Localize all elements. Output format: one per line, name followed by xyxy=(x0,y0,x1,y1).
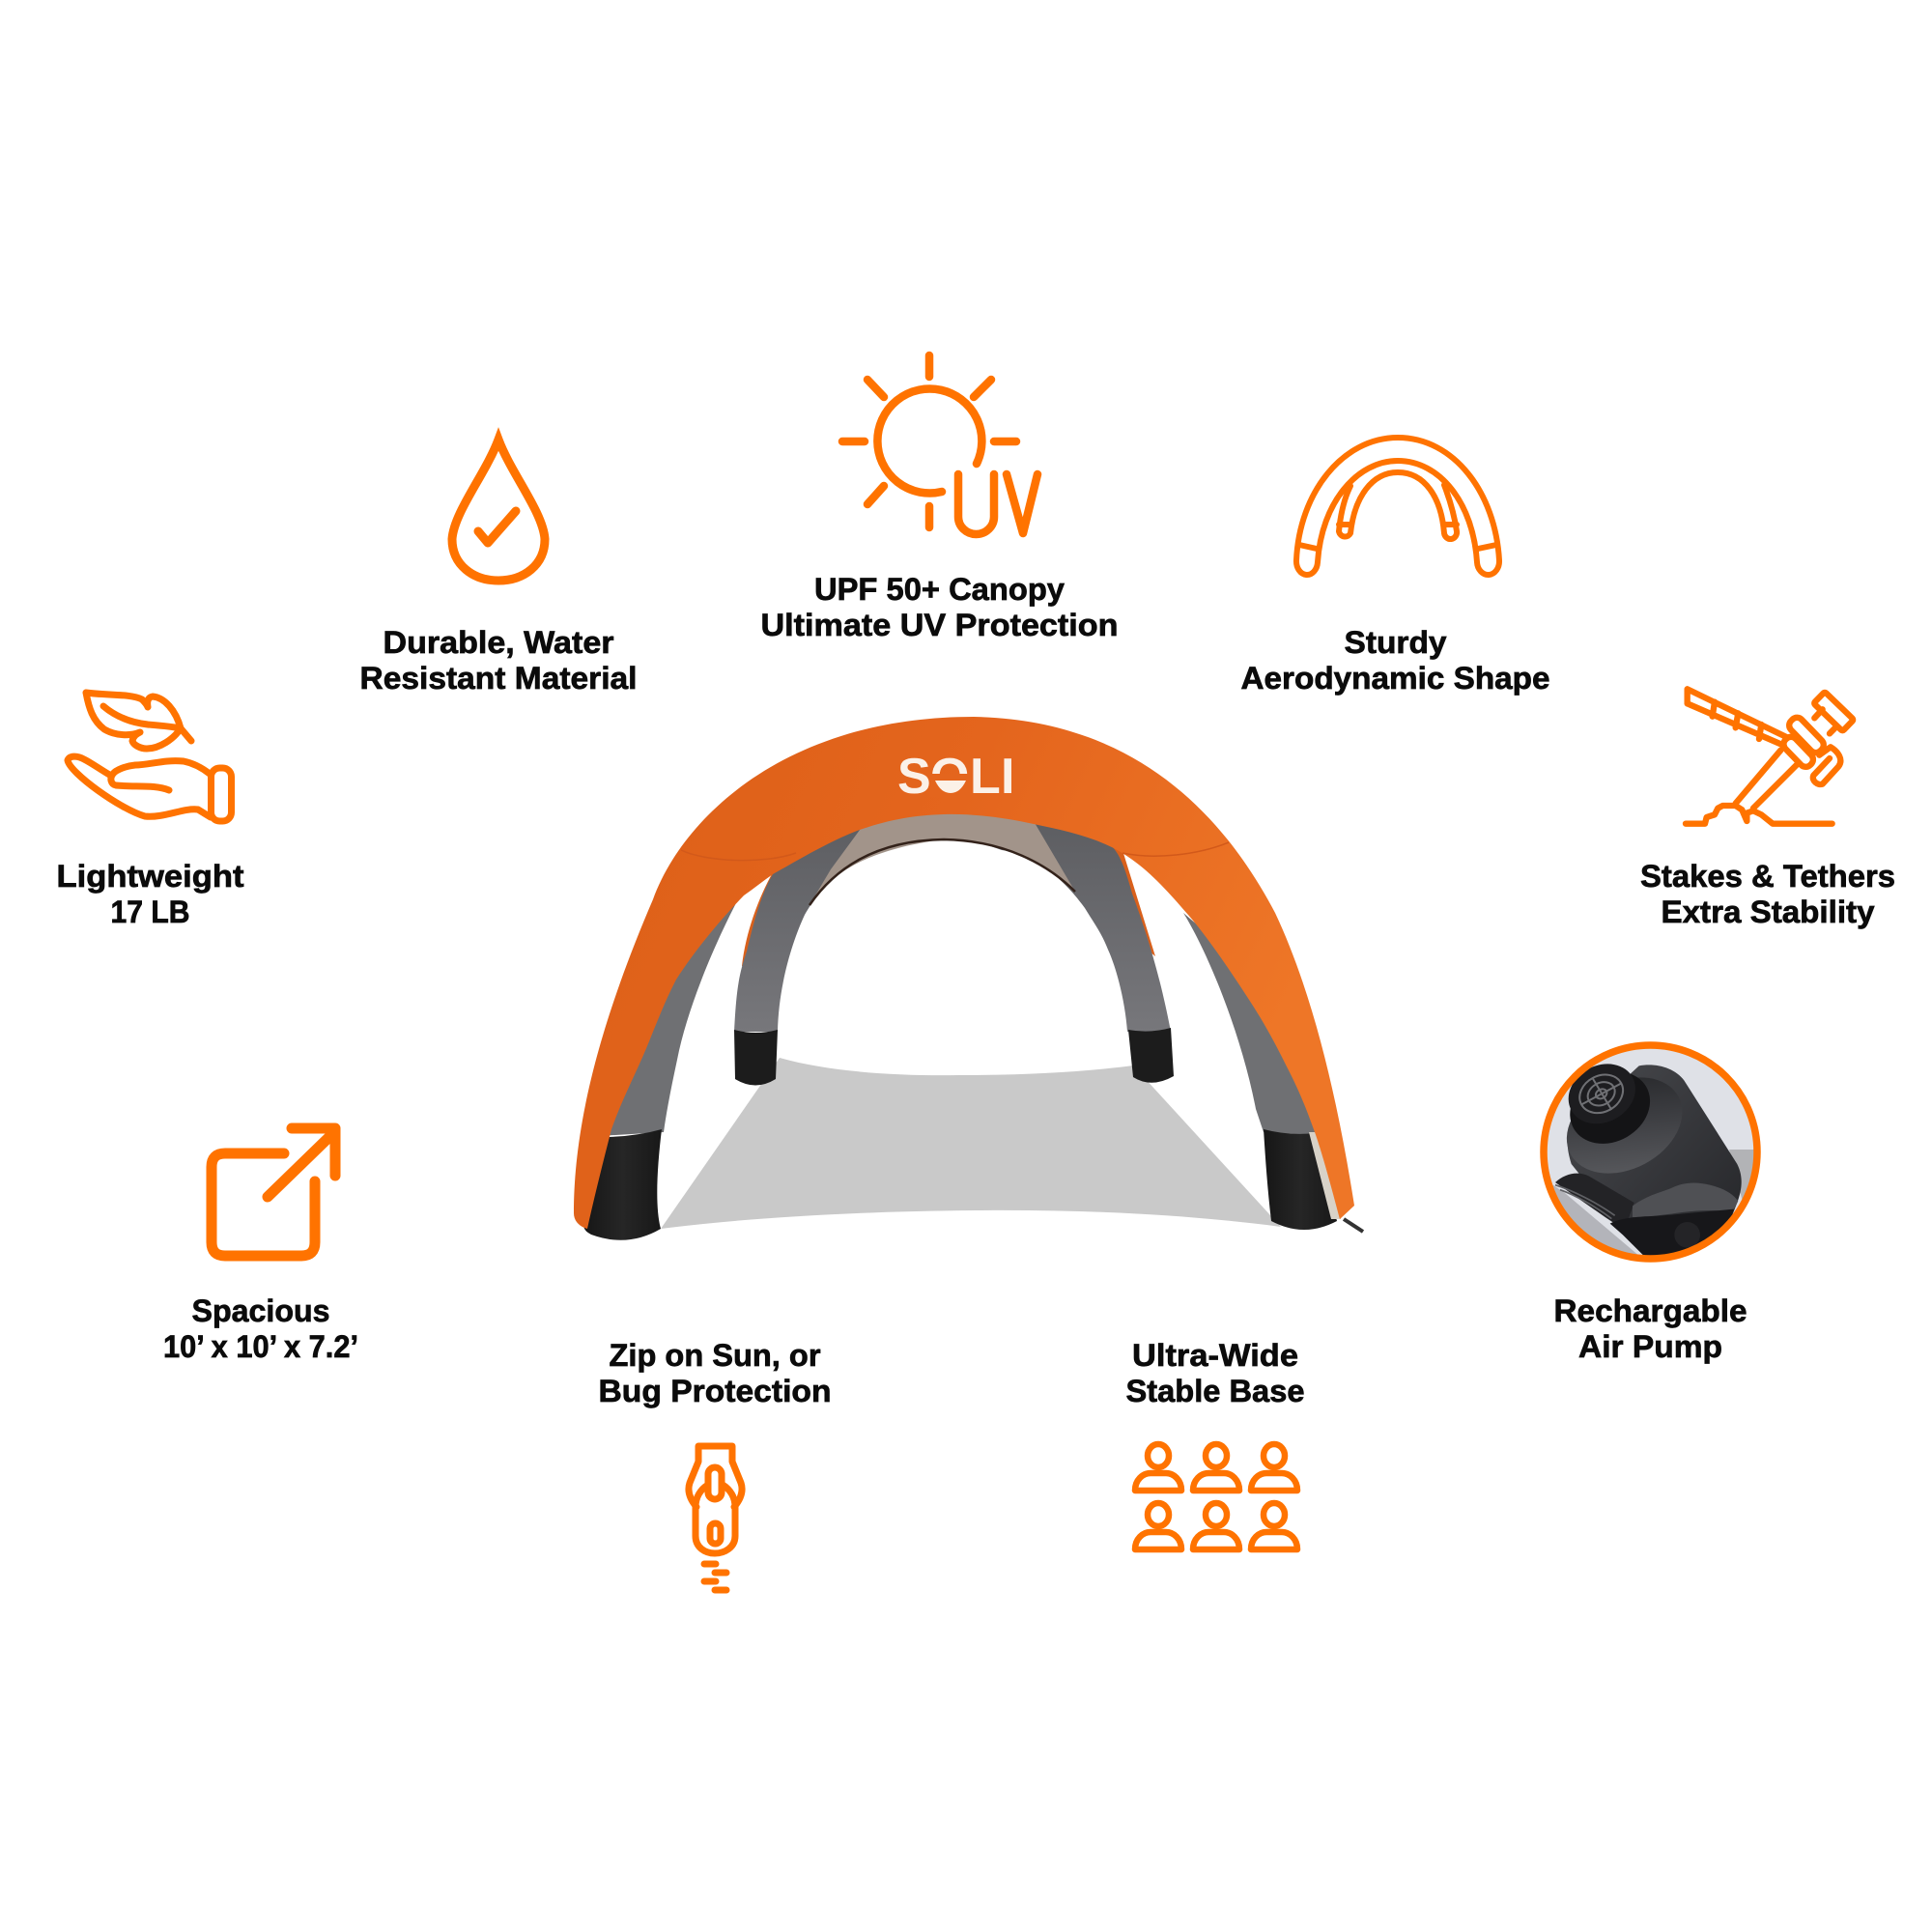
icon: zipper xyxy=(689,1446,742,1590)
label: spacious: 10’ x 10’ x 7.2’ xyxy=(163,1329,358,1364)
icon: sun with UV xyxy=(842,355,1037,534)
label: durable material: Durable, Water xyxy=(383,625,614,660)
pump circle ring xyxy=(1544,1045,1757,1259)
back right cuff xyxy=(1128,1028,1174,1083)
air pump photo in circle xyxy=(1536,1038,1768,1270)
back orange strips xyxy=(742,846,1155,966)
orange canopy xyxy=(574,717,1354,1229)
icon: six people xyxy=(1135,1444,1297,1549)
front right grey leg xyxy=(1183,913,1323,1136)
label: air pump: Rechargable xyxy=(1553,1293,1747,1328)
label: air pump: Air Pump xyxy=(1578,1329,1722,1364)
rear opening edge xyxy=(810,839,1075,905)
label: lightweight: 17 LB xyxy=(110,895,189,929)
back arch xyxy=(734,816,1171,1032)
label: zip protection: Zip on Sun, or xyxy=(609,1338,821,1373)
SOLI logo: SOLI xyxy=(897,749,1014,805)
label: sturdy shape xyxy=(1240,625,1549,696)
label: zip protection xyxy=(599,1338,831,1408)
label: sturdy shape: Aerodynamic Shape xyxy=(1240,661,1549,696)
label: UPF canopy xyxy=(761,572,1119,642)
icon: stake and tether xyxy=(1686,689,1854,824)
canopy rim xyxy=(1309,1132,1341,1219)
label: lightweight xyxy=(56,859,244,929)
label: lightweight: Lightweight xyxy=(56,859,244,894)
label: spacious: Spacious xyxy=(191,1293,330,1328)
label: UPF canopy: Ultimate UV Protection xyxy=(761,608,1119,642)
ground shadow xyxy=(661,1058,1281,1229)
canopy seams xyxy=(681,842,1229,861)
front right cuff xyxy=(1264,1129,1337,1230)
infographic canvas xyxy=(58,352,1894,1594)
icon: water drop with check xyxy=(452,440,545,581)
label: sturdy shape: Sturdy xyxy=(1345,625,1447,660)
front left cuff xyxy=(583,1129,662,1240)
front left grey leg xyxy=(599,889,744,1136)
label: ultra-wide base: Ultra-Wide xyxy=(1132,1338,1298,1373)
icon: sturdy arch xyxy=(1296,438,1499,575)
tent illustration xyxy=(574,717,1363,1240)
label: UPF canopy: UPF 50+ Canopy xyxy=(814,572,1065,607)
label: zip protection: Bug Protection xyxy=(599,1374,831,1408)
icon: expand arrow box xyxy=(212,1128,335,1256)
tether cord xyxy=(1344,1219,1363,1232)
label: durable material: Resistant Material xyxy=(359,661,638,696)
label: stakes and tethers xyxy=(1640,859,1895,929)
back left cuff xyxy=(734,1030,778,1086)
label: ultra-wide base: Stable Base xyxy=(1126,1374,1304,1408)
label: ultra-wide base xyxy=(1126,1338,1304,1408)
label: spacious xyxy=(163,1293,358,1364)
label: air pump xyxy=(1553,1293,1747,1364)
icon: leaf over hand xyxy=(68,693,232,821)
label: stakes and tethers: Stakes & Tethers xyxy=(1640,859,1895,894)
rear interior panel xyxy=(810,811,1075,905)
label: stakes and tethers: Extra Stability xyxy=(1662,895,1875,929)
label: durable material xyxy=(359,625,638,696)
